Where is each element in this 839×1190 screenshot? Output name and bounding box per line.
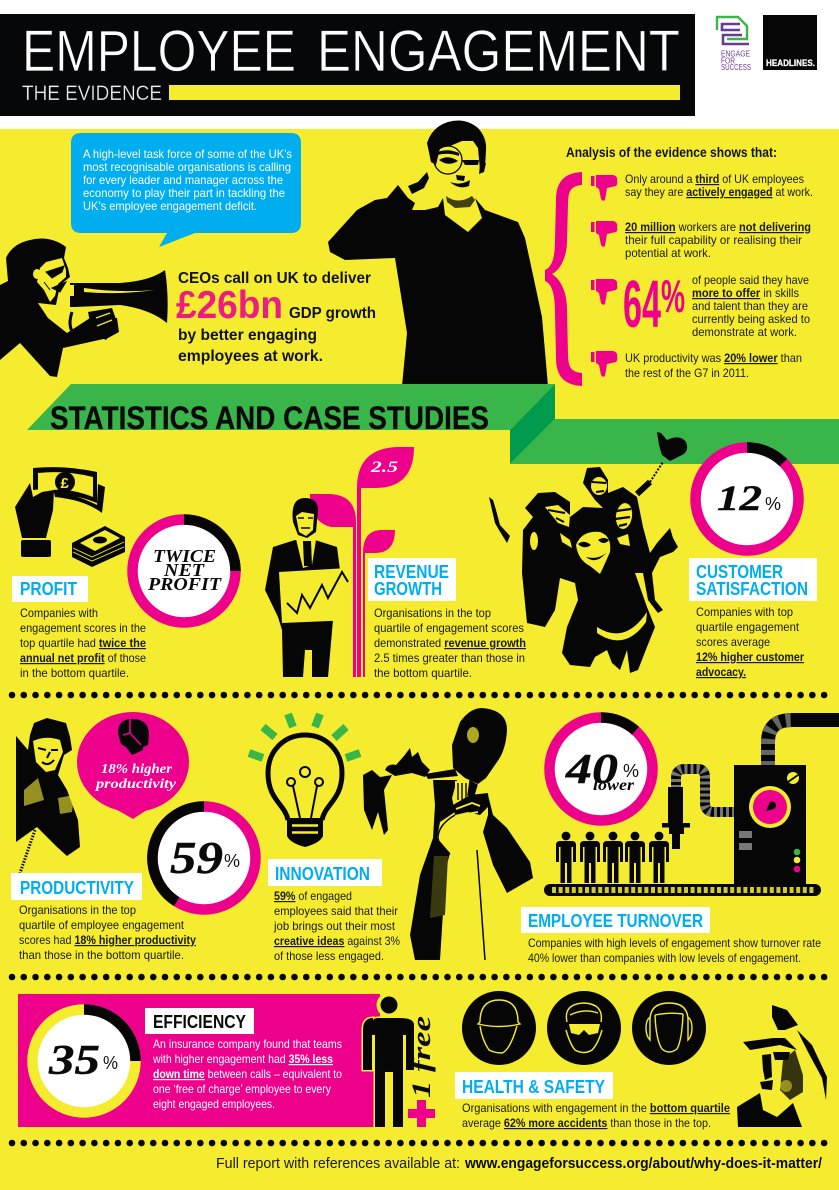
donut: twice net profit: NET: [163, 560, 205, 580]
body text: scores had 18% higher productivity: [19, 933, 196, 947]
body text: scores average: [696, 635, 770, 649]
footer: report link: Full report with references available at:: [216, 1155, 460, 1172]
illustration: growth plant stems: 2.5: [370, 459, 398, 476]
body text: demonstrated revenue growth: [374, 636, 526, 650]
header banner: [0, 14, 695, 116]
body text: annual net profit of those: [20, 651, 146, 665]
icon: extra employee, 1 free: [363, 994, 436, 1127]
body text: An insurance company found that teams: [153, 1037, 342, 1051]
logo: Engage for Success: FOR: [721, 56, 735, 66]
panel: efficiency: [18, 994, 380, 1127]
illustration: man with megaphone: [0, 239, 168, 377]
section: customer satisfaction: [689, 558, 817, 679]
icon: hand with banknotes: £: [60, 475, 70, 492]
body text: [152, 1037, 342, 1111]
body text: engagement scores in the: [20, 621, 146, 635]
evidence point 2: [625, 220, 811, 260]
heading label: [455, 1072, 613, 1099]
evidence point 3: more to offer in skills: [692, 286, 799, 300]
body text: [374, 606, 526, 680]
logo: Headlines: HEADLINES.: [766, 58, 815, 68]
icon: light bulb: [249, 714, 360, 847]
icons: safety equipment: [462, 991, 706, 1065]
donut: 59%: %: [224, 851, 240, 871]
evidence point 3: demonstrate at work.: [692, 325, 797, 339]
body text: job brings out their most: [273, 919, 396, 933]
body text: in the bottom quartile.: [20, 666, 129, 680]
callout: £26bn GDP growth: by better engaging: [178, 327, 317, 344]
body text: advocacy.: [696, 665, 746, 679]
donut: 35%: 35: [48, 1038, 100, 1084]
body text: down time between calls – equivalent to: [153, 1067, 342, 1081]
icon: extra employee, 1 free: 1 free: [407, 1016, 436, 1098]
body text: [20, 606, 146, 680]
heading label: CUSTOMER: [696, 562, 783, 582]
evidence point 4: UK productivity was 20% lower than: [625, 351, 802, 365]
evidence point 3: of people said they have: [692, 273, 809, 287]
section banner: statistics and case studies: [27, 384, 839, 464]
logo: Engage for Success: [717, 17, 751, 72]
icon: hand with banknotes: [15, 467, 105, 557]
callout: £26bn GDP growth: employees at work.: [178, 348, 323, 365]
title: [22, 19, 680, 84]
evidence point 1: Only around a third of UK employees: [625, 172, 804, 186]
section: profit: [12, 576, 146, 680]
heading label: EFFICIENCY: [153, 1012, 246, 1032]
section banner: statistics and case studies: STATISTICS AND CASE STUDIES: [50, 400, 489, 436]
donut: 35%: %: [103, 1053, 118, 1073]
body text: employees said that their: [274, 904, 398, 918]
illustration: group of cheering people: [489, 432, 687, 673]
body text: Organisations with engagement in the bottom quartile: [462, 1101, 730, 1115]
heading label: EMPLOYEE TURNOVER: [528, 911, 703, 931]
heading label: PROFIT: [20, 579, 77, 599]
donut: 40% lower: [550, 717, 652, 820]
body text: Organisations in the top: [374, 606, 491, 620]
logo: Engage for Success: ENGAGE: [721, 48, 750, 58]
speech bubble: 18% higher productivity: [77, 712, 189, 819]
heading label: PRODUCTIVITY: [20, 878, 134, 898]
illustration: saluting guard: [737, 1005, 827, 1127]
body text: [696, 605, 804, 679]
footer: report link: [216, 1155, 823, 1172]
callout: £26bn GDP growth: £26bn: [176, 284, 283, 327]
body text: [273, 889, 400, 963]
callout: £26bn GDP growth: CEOs call on UK to deliver: [178, 270, 371, 287]
body text: quartile engagement: [696, 620, 800, 634]
body text: quartile of employee engagement: [19, 918, 185, 932]
body text: Companies with top: [696, 605, 793, 619]
body text: Companies with: [20, 606, 98, 620]
heading label: SATISFACTION: [696, 579, 808, 599]
evidence point 3: [692, 273, 810, 339]
illustration: growth plant stems: [310, 447, 414, 677]
section: health and safety: [455, 1072, 730, 1130]
evidence point 1: say they are actively engaged at work.: [625, 185, 813, 199]
icon: thumbs down 1: [591, 175, 617, 201]
section: innovation: [268, 859, 400, 963]
people on conveyor: [556, 832, 669, 883]
illustration: man with magnifying glass: [328, 120, 548, 386]
body text: with higher engagement had 35% less: [152, 1052, 333, 1066]
evidence point 2: 20 million workers are not delivering: [625, 220, 811, 234]
body text: quartile of engagement scores: [374, 621, 524, 635]
speech bubble: task force: most recognisable organisations is calling: [83, 160, 291, 174]
icon: thumbs down 2: [591, 221, 617, 247]
speech bubble: task force: economy to play their part in tackling the: [83, 186, 285, 200]
section: employee turnover: [521, 907, 821, 965]
body text: [462, 1101, 730, 1130]
heading label: [521, 907, 710, 933]
illustration: machine and conveyor: [544, 720, 839, 896]
donut: 40% lower: 40: [565, 747, 618, 793]
title: EMPLOYEE: [22, 19, 296, 84]
icon: thumbs down 4: [591, 351, 617, 377]
stat: 64%: 64: [623, 267, 661, 342]
illustration: scientist with test tube: [363, 708, 533, 960]
heading label: HEALTH & SAFETY: [462, 1077, 605, 1097]
heading label: INNOVATION: [275, 864, 370, 884]
body text: [19, 903, 196, 962]
donut: 59%: 59: [170, 832, 223, 883]
illustration: man on telephone: [16, 718, 80, 873]
evidence point 4: [625, 351, 802, 380]
body text: the bottom quartile.: [374, 666, 472, 680]
logo: Engage for Success: SUCCESS: [721, 62, 751, 72]
body text: 12% higher customer: [696, 650, 804, 664]
body text: of those less engaged.: [274, 949, 384, 963]
heading label: GROWTH: [374, 579, 442, 599]
evidence point 3: and talent than they are: [692, 299, 808, 313]
stat: 64%: %: [661, 270, 685, 322]
donut: 12%: 12: [717, 478, 762, 518]
icon: thumbs down 3: [591, 279, 617, 305]
body text: 40% lower than companies with low levels of engagement.: [528, 951, 801, 965]
body text: Organisations in the top: [19, 903, 136, 917]
donut: 40% lower: lower: [593, 777, 635, 794]
heading: Analysis of the evidence shows that:: [566, 145, 777, 160]
evidence point 4: the rest of the G7 in 2011.: [625, 366, 749, 380]
icon: goggles: [547, 991, 621, 1065]
icon: head with clock: [118, 719, 149, 755]
callout: £26bn GDP growth: GDP growth: [289, 305, 376, 322]
curly brace: [545, 172, 582, 386]
donut: 40% lower: %: [623, 761, 639, 781]
section: revenue growth: [368, 558, 526, 680]
callout: £26bn GDP growth: [176, 270, 376, 365]
speech bubble: 18% higher productivity: 18% higher: [101, 762, 173, 777]
subtitle: THE EVIDENCE: [22, 82, 162, 105]
evidence point 3: currently being asked to: [692, 312, 810, 326]
icon: hard hat: [462, 991, 536, 1065]
heading label: [145, 1008, 254, 1034]
body text: eight engaged employees.: [153, 1097, 275, 1111]
donut: 59%: [152, 806, 256, 910]
subtitle bar: [169, 85, 680, 100]
donut: 35%: [32, 1010, 136, 1112]
body text: average 62% more accidents than those in the top.: [462, 1116, 711, 1130]
title: ENGAGEMENT: [317, 19, 680, 84]
body text: 59% of engaged: [274, 889, 352, 903]
donut: twice net profit: PROFIT: [147, 574, 222, 594]
heading label: [11, 873, 142, 900]
body text: one ‘free of charge’ employee to every: [153, 1082, 331, 1096]
evidence point 1: [625, 172, 813, 199]
body text: creative ideas against 3%: [274, 934, 400, 948]
evidence point 2: potential at work.: [625, 246, 711, 260]
icon: stack of cash: [72, 526, 125, 567]
icon: ear defenders: [632, 991, 706, 1065]
speech bubble: task force: for every leader and manager across the: [83, 173, 283, 187]
donut: 12%: %: [765, 494, 781, 514]
body text: top quartile had twice the: [20, 636, 146, 650]
panel: analysis of the evidence: [566, 145, 813, 380]
donut: twice net profit: TWICE: [153, 546, 216, 566]
logo: Headlines: [763, 15, 817, 70]
speech bubble: 18% higher productivity: productivity: [95, 777, 177, 792]
illustration: businessman with chart: [265, 498, 353, 677]
speech bubble: task force: UK’s employee engagement deficit.: [83, 199, 257, 213]
section: productivity: [11, 873, 196, 962]
evidence point 2: their full capability or realising their: [625, 233, 802, 247]
speech bubble: task force: [71, 133, 301, 247]
heading label: REVENUE: [374, 562, 449, 582]
donut: twice net profit: [132, 520, 236, 622]
heading label: [689, 558, 817, 601]
donut: 12%: [696, 448, 798, 550]
speech bubble: task force: A high-level task force of some of the UK’s: [83, 147, 292, 161]
body text: than those in the bottom quartile.: [19, 948, 184, 962]
body text: [528, 936, 821, 965]
body text: 2.5 times greater than those in: [374, 651, 525, 665]
heading label: [368, 558, 456, 601]
